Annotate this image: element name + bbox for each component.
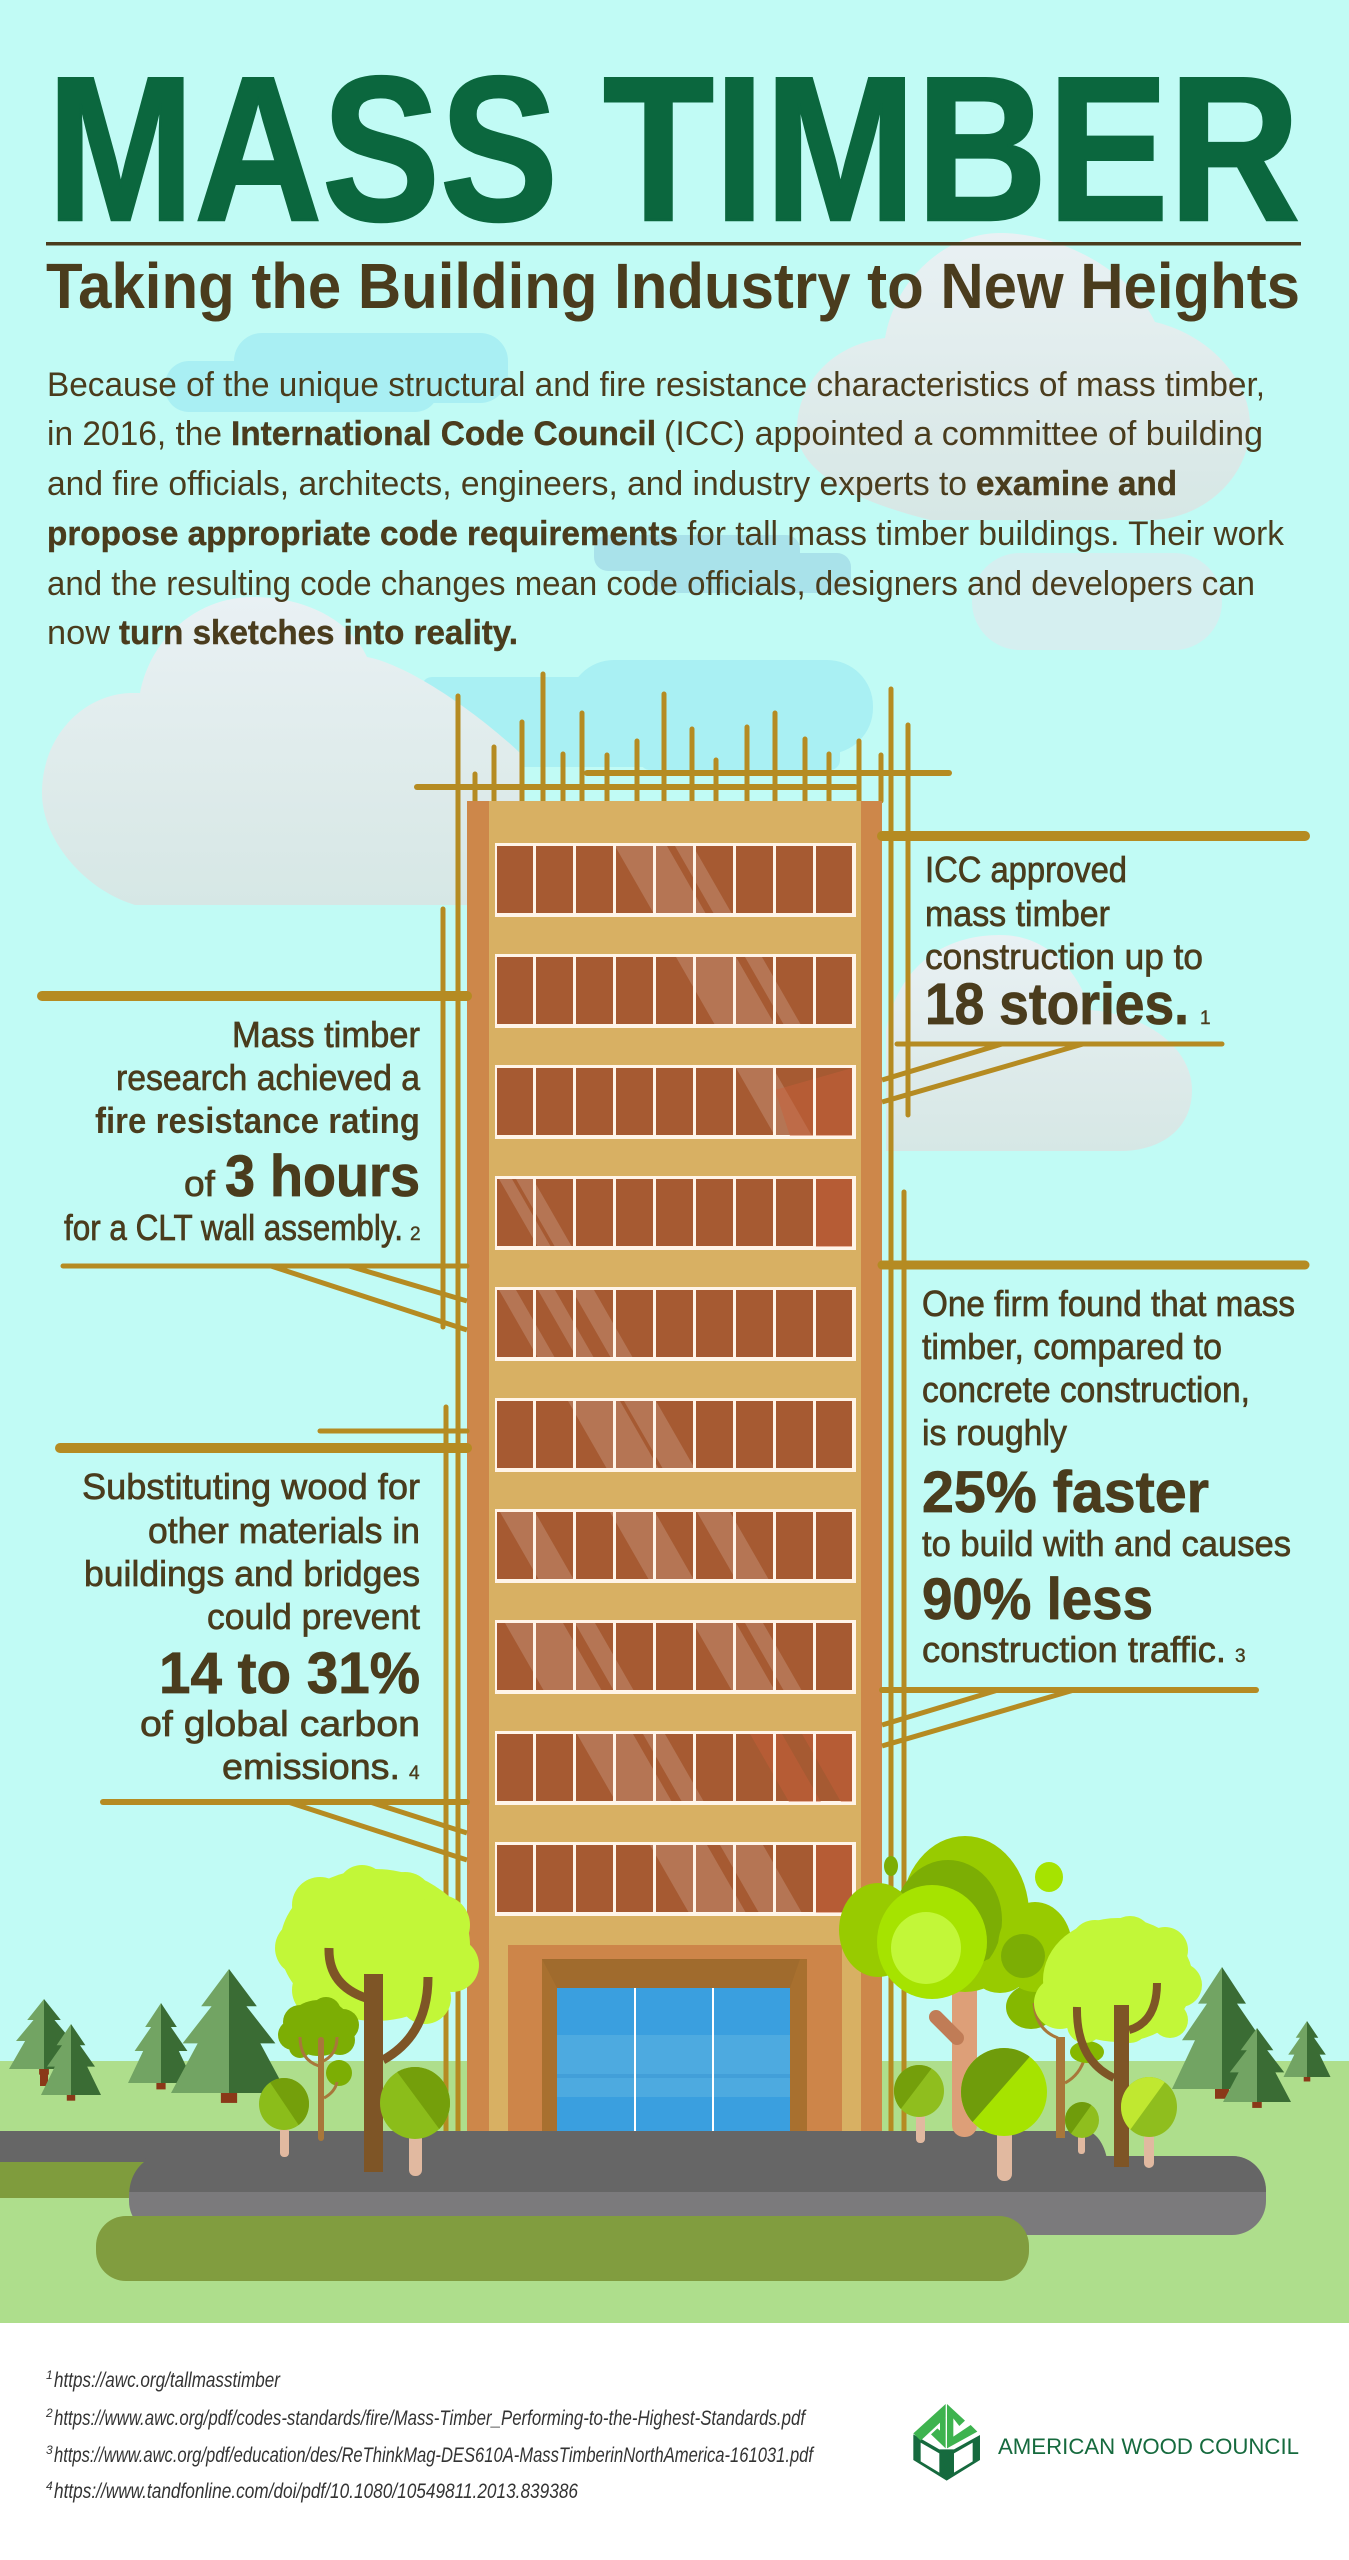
pine trees left	[9, 1969, 287, 2103]
title: MASS	[47, 34, 558, 264]
ground	[0, 2061, 1349, 2323]
footnotes: https://awc.org/tallmasstimber	[54, 2369, 281, 2392]
callout: carbon emissions: of global carbon	[140, 1703, 420, 1744]
window row 6	[495, 1398, 856, 1472]
road	[0, 2131, 1266, 2235]
callout: 25% faster, 90% less	[922, 1283, 1295, 1670]
title rule	[46, 242, 1301, 246]
intro paragraph	[47, 366, 1285, 652]
callout connector lines	[42, 836, 1305, 1860]
callout: carbon emissions: other materials in	[148, 1510, 420, 1551]
lines: fire rating callout	[42, 996, 467, 1330]
round tree 3	[1065, 2102, 1099, 2154]
callout: fire resistance: fire resistance rating	[95, 1100, 420, 1141]
callout: carbon emissions: 4	[409, 1763, 420, 1784]
callout: carbon emissions: 14 to 31%	[159, 1641, 420, 1706]
grass strip bottom	[96, 2216, 1029, 2281]
footnotes: 3	[46, 2443, 53, 2457]
lines: ICC callout	[882, 836, 1305, 1102]
entrance	[508, 1945, 842, 2132]
tree: large lime left	[259, 1865, 479, 2176]
lines: firm callout	[882, 1265, 1305, 1746]
callout: carbon emissions: Substituting wood for	[82, 1466, 420, 1507]
title	[47, 34, 1300, 264]
callout: 25% faster, 90% less: is roughly	[922, 1412, 1067, 1453]
callout: ICC 18 stories: mass timber	[925, 893, 1110, 934]
callout: fire resistance: 2	[410, 1224, 421, 1245]
callout: fire resistance: 3 hours	[225, 1144, 420, 1209]
brown thin tree	[1034, 2003, 1104, 2138]
callout: 25% faster, 90% less: 3	[1235, 1646, 1246, 1667]
callout: ICC 18 stories: 1	[1200, 1008, 1211, 1029]
callout: fire resistance: of	[184, 1163, 216, 1204]
right pillar	[861, 801, 882, 2132]
callout: 25% faster, 90% less: timber, compared to	[922, 1326, 1222, 1367]
building facade	[467, 801, 882, 2132]
gray cloud right middle	[886, 935, 1192, 1151]
building	[467, 801, 882, 2132]
gray cloud upper right	[797, 233, 1250, 520]
intro paragraph: for tall mass timber buildings. Their work	[687, 515, 1285, 553]
footnotes: 1	[46, 2368, 53, 2382]
left pillar	[467, 801, 489, 2132]
round tree small	[259, 2078, 309, 2157]
intro paragraph: examine and	[976, 465, 1177, 503]
callout: 25% faster, 90% less: to build with and causes	[922, 1523, 1291, 1564]
pine trees right	[1172, 1967, 1330, 2108]
callout: carbon emissions: buildings and bridges	[84, 1553, 420, 1594]
footnotes: 2	[45, 2406, 53, 2420]
salmon trunk tree	[839, 1836, 1072, 2137]
footnotes	[45, 2368, 815, 2503]
intro paragraph: International Code Council	[231, 415, 656, 453]
callout: ICC 18 stories	[925, 849, 1211, 1037]
callout: carbon emissions	[82, 1466, 420, 1787]
logo: American Wood Council	[913, 2404, 1299, 2481]
logo mark	[913, 2404, 980, 2481]
callout: ICC 18 stories: construction up to	[925, 936, 1203, 977]
callout: ICC 18 stories: 18 stories.	[925, 972, 1189, 1037]
round tree 1	[894, 2065, 944, 2143]
footnotes: https://www.tandfonline.com/doi/pdf/10.1080/10549811.2013.839386	[54, 2480, 578, 2503]
callout: 25% faster, 90% less: concrete construction,	[922, 1369, 1250, 1410]
gray cloud left	[42, 597, 520, 905]
intro paragraph: and fire officials, architects, engineers, and industry experts to	[47, 465, 967, 503]
footnotes: https://www.awc.org/pdf/education/des/ReThinkMag-DES610A-MassTimberinNorthAmerica-161031.pdf	[54, 2444, 815, 2467]
window row 7	[495, 1509, 856, 1583]
blue cloud behind building top	[422, 660, 873, 770]
window row 3	[495, 1065, 856, 1139]
callout: ICC 18 stories: ICC approved	[925, 849, 1127, 890]
window row 8	[495, 1620, 856, 1694]
window row 2	[495, 954, 856, 1028]
callout: fire resistance: research achieved a	[116, 1057, 421, 1098]
intro paragraph: Because of the unique structural and fire resistance characteristics of mass timber,	[47, 366, 1265, 404]
subtitle: Taking the Building Industry to New Heights	[46, 250, 1300, 322]
callout: fire resistance	[64, 1014, 421, 1248]
round tree medium	[380, 2065, 455, 2176]
clouds	[42, 233, 1250, 1151]
intro paragraph: turn sketches into reality.	[119, 614, 518, 652]
callout: 25% faster, 90% less: 25% faster	[922, 1460, 1209, 1525]
intro paragraph: (ICC) appointed a committee of building	[664, 415, 1263, 453]
tree group right	[839, 1836, 1202, 2181]
lines: carbon callout	[60, 1431, 467, 1860]
footer panel	[0, 2323, 1349, 2560]
callout: carbon emissions: emissions.	[222, 1746, 400, 1787]
window row 1	[495, 843, 856, 917]
round tree 4	[1120, 2075, 1177, 2168]
intro paragraph: now	[47, 614, 110, 652]
callout: fire resistance: for a CLT wall assembly.	[64, 1207, 403, 1248]
blue cloud centre right	[594, 535, 851, 593]
grass strip left	[0, 2162, 144, 2198]
window row 4	[495, 1176, 856, 1250]
callout: 25% faster, 90% less: One firm found that mass	[922, 1283, 1295, 1324]
window row 5	[495, 1287, 856, 1361]
scaffold rods behind building	[417, 674, 949, 2138]
callout: carbon emissions: could prevent	[207, 1596, 420, 1637]
footnotes: https://www.awc.org/pdf/codes-standards/fire/Mass-Timber_Performing-to-the-Highest-Standards.pdf	[54, 2407, 807, 2430]
intro paragraph: propose appropriate code requirements	[47, 515, 678, 553]
window row 9	[495, 1731, 856, 1805]
footnotes: 4	[46, 2479, 53, 2493]
callout: 25% faster, 90% less: 90% less	[922, 1567, 1153, 1632]
blue cloud upper left	[165, 333, 508, 412]
intro paragraph: in 2016, the	[47, 415, 222, 453]
small green tree	[278, 1997, 359, 2141]
window row 10	[495, 1842, 856, 1916]
callout: fire resistance: Mass timber	[232, 1014, 420, 1055]
callout: 25% faster, 90% less: construction traffic.	[922, 1629, 1226, 1670]
gray cloud lower right	[972, 553, 1222, 650]
glass doors	[557, 1988, 790, 2132]
intro paragraph: and the resulting code changes mean code officials, designers and developers can	[47, 565, 1255, 603]
lime tree right	[1034, 1916, 1202, 2167]
round tree 2	[955, 2045, 1047, 2181]
logo wordmark: AMERICAN WOOD COUNCIL	[998, 2434, 1299, 2459]
rod bubble	[884, 1856, 898, 1876]
